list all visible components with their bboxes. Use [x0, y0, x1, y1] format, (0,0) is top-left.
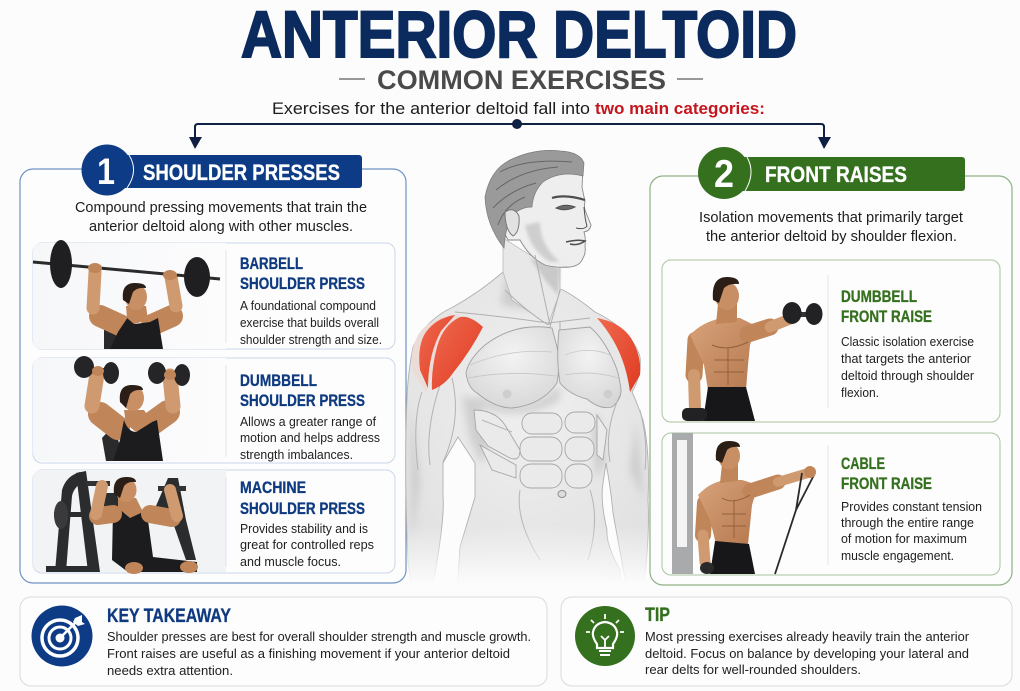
illustration: anatomical torso with highlighted anterior deltoids [406, 150, 649, 595]
heading: shoulder presses banner: 1 [97, 151, 115, 192]
head [499, 160, 591, 267]
heading: front raises banner: 2 [714, 153, 734, 196]
text: cable front raise: CABLE [841, 455, 885, 473]
text: tip: deltoid. Focus on balance by developing your lateral and [645, 647, 969, 661]
subtitle: COMMON EXERCISES [377, 65, 666, 95]
text: barbell shoulder press: shoulder strength and size. [240, 333, 382, 347]
heading: shoulder presses banner [82, 144, 362, 196]
text: cable front raise: FRONT RAISE [841, 475, 932, 493]
illustration: barbell press [33, 240, 220, 349]
card: dumbbell shoulder press [33, 356, 395, 463]
intro sentence [272, 100, 765, 118]
callout: key takeaway [20, 597, 547, 686]
chest muscles [466, 327, 621, 408]
text: shoulder presses description: Compound pressing movements that train the [75, 200, 367, 216]
text: tip: Most pressing exercises already heavily train the anterior [645, 630, 969, 644]
text: key takeaway: Shoulder presses are best for overall shoulder strength and muscle growth. [107, 630, 531, 644]
callout: tip [561, 597, 1012, 686]
text: barbell shoulder press: SHOULDER PRESS [240, 275, 365, 293]
arm muscle lines [416, 378, 646, 470]
nipples [502, 390, 512, 398]
text: front raises description: Isolation movements that primarily target [699, 210, 963, 226]
intro sentence: Exercises for the anterior deltoid fall into [272, 100, 590, 118]
left deltoid [411, 314, 483, 392]
abdominal muscles [474, 410, 607, 488]
panel: front raises [650, 147, 1012, 585]
heading: shoulder presses banner: SHOULDER PRESSES [143, 160, 340, 185]
text: dumbbell front raise: that targets the anterior [841, 352, 971, 366]
text: dumbbell shoulder press [240, 372, 380, 462]
arrow: split into two categories [189, 119, 831, 149]
text: dumbbell front raise [841, 288, 974, 400]
illustration: cable front raise [672, 433, 816, 574]
icon: target with arrow [32, 606, 92, 666]
text: barbell shoulder press: BARBELL [240, 255, 303, 273]
text: machine shoulder press [240, 479, 374, 569]
illustration: dumbbell press [74, 356, 190, 461]
ear [505, 210, 519, 236]
text: key takeaway: needs extra attention. [107, 664, 233, 678]
text: dumbbell shoulder press: strength imbalances. [240, 448, 353, 462]
text: dumbbell front raise: FRONT RAISE [841, 308, 932, 326]
text: cable front raise: muscle engagement. [841, 549, 954, 563]
text: machine shoulder press: and muscle focus. [240, 555, 341, 569]
body silhouette [406, 272, 648, 592]
heading: front raises banner: FRONT RAISES [765, 162, 907, 187]
text: key takeaway: KEY TAKEAWAY [107, 606, 231, 627]
text: machine shoulder press: SHOULDER PRESS [240, 500, 365, 518]
oblique lines [482, 420, 595, 560]
fade at bottom [407, 525, 649, 595]
text: cable front raise [841, 455, 982, 563]
text: cable front raise: through the entire range [841, 516, 974, 530]
hair [485, 150, 584, 248]
intro sentence: two main categories: [595, 100, 765, 118]
neck shadow [530, 258, 560, 295]
soft body shading [410, 270, 644, 540]
neck [503, 238, 560, 325]
text: cable front raise: Provides constant tension [841, 500, 982, 514]
card: machine shoulder press [33, 470, 395, 574]
text: tip: rear delts for well-rounded shoulders. [645, 663, 861, 677]
text: dumbbell shoulder press: SHOULDER PRESS [240, 392, 365, 410]
text: dumbbell shoulder press: Allows a greater range of [240, 415, 377, 429]
heading: front raises banner [698, 147, 965, 199]
text: dumbbell shoulder press: DUMBBELL [240, 372, 317, 390]
face shading [525, 222, 560, 262]
card: dumbbell front raise [662, 260, 1000, 422]
illustration: machine press [46, 471, 198, 574]
text: dumbbell front raise: flexion. [841, 386, 879, 400]
text: barbell shoulder press [240, 255, 382, 347]
collar lines [455, 255, 590, 345]
text: front raises description [699, 210, 963, 245]
text: tip: TIP [645, 605, 670, 626]
navel [558, 490, 566, 498]
card: cable front raise [662, 433, 1000, 575]
panel: shoulder presses [20, 144, 406, 583]
illustration: dumbbell front raise [682, 277, 822, 421]
text: shoulder presses description: anterior deltoid along with other muscles. [89, 219, 353, 235]
text: barbell shoulder press: exercise that builds overall [240, 316, 379, 330]
text: dumbbell front raise: deltoid through shoulder [841, 369, 974, 383]
text: dumbbell front raise: Classic isolation exercise [841, 335, 974, 349]
text: key takeaway: Front raises are useful as a finishing movement if your anterior deltoid [107, 647, 510, 661]
face features [552, 196, 587, 245]
right deltoid [597, 318, 640, 392]
text: barbell shoulder press: A foundational compound [240, 299, 376, 313]
text: dumbbell shoulder press: motion and helps address [240, 431, 380, 445]
text: machine shoulder press: great for controlled reps [240, 538, 374, 552]
text: machine shoulder press: MACHINE [240, 479, 306, 497]
text: key takeaway [107, 606, 531, 678]
text: machine shoulder press: Provides stability and is [240, 522, 368, 536]
text: cable front raise: of motion for maximum [841, 532, 967, 546]
icon: light bulb [575, 606, 635, 666]
text: shoulder presses description [75, 200, 367, 235]
text: front raises description: the anterior deltoid by shoulder flexion. [706, 229, 957, 245]
card: barbell shoulder press [33, 240, 395, 349]
text: tip [645, 605, 969, 677]
text: dumbbell front raise: DUMBBELL [841, 288, 917, 306]
